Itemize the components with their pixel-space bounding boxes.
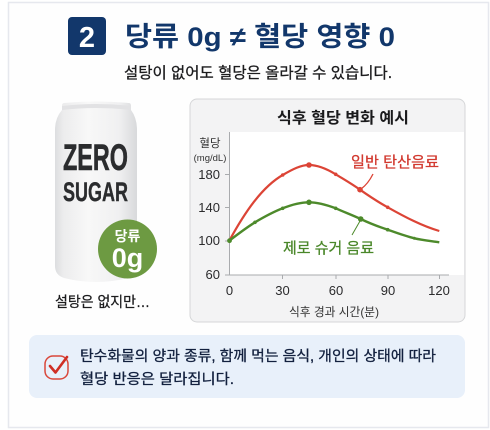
green sugar badge: 당류 xyxy=(115,228,140,244)
can caption: 설탕은 없지만… xyxy=(55,294,150,311)
x axis labels: 90 xyxy=(381,283,395,298)
red series label xyxy=(351,154,439,189)
green series label: 제로 슈거 음료 xyxy=(283,240,374,257)
green sugar badge xyxy=(98,220,157,278)
y axis labels: 140 xyxy=(198,200,220,215)
title: 당류 0g ≠ 혈당 영향 0 xyxy=(125,22,395,52)
red line: regular soda xyxy=(229,162,439,241)
x axis labels: 0 xyxy=(226,283,233,298)
y axis labels xyxy=(198,167,220,282)
callout xyxy=(29,335,465,398)
x axis labels: 30 xyxy=(275,283,290,298)
chart title: 식후 혈당 변화 예시 xyxy=(277,109,409,127)
x axis labels xyxy=(226,283,450,298)
y axis title: 혈당 xyxy=(199,136,221,150)
can label: zero: ZERO xyxy=(63,137,128,178)
green line: zero sugar drink xyxy=(227,200,439,243)
callout text: 혈당 반응은 달라집니다. xyxy=(80,371,234,388)
y axis labels: 60 xyxy=(206,267,220,282)
callout text: 탄수화물의 양과 종류, 함께 먹는 음식, 개인의 상태에 따라 xyxy=(80,348,436,365)
green sugar badge: 0g xyxy=(112,243,143,273)
callout text xyxy=(80,348,436,388)
x axis labels: 60 xyxy=(329,283,343,298)
title badge xyxy=(68,17,106,55)
plot background xyxy=(229,132,464,275)
y axis labels: 100 xyxy=(198,233,220,248)
can illustration xyxy=(55,102,137,282)
x axis labels: 120 xyxy=(428,283,450,298)
subtitle: 설탕이 없어도 혈당은 올라갈 수 있습니다. xyxy=(124,64,392,82)
icon: check xyxy=(45,356,68,379)
y axis title: (mg/dL) xyxy=(194,153,226,164)
can label: sugar: SUGAR xyxy=(63,177,128,207)
green series label xyxy=(283,221,374,257)
can body xyxy=(55,102,137,282)
axes xyxy=(225,132,449,279)
y axis title xyxy=(194,136,226,164)
red series label: 일반 탄산음료 xyxy=(351,154,439,171)
y axis labels: 180 xyxy=(198,167,220,182)
x axis title: 식후 경과 시간(분) xyxy=(289,305,379,319)
panel: chart xyxy=(190,99,465,322)
can rim xyxy=(62,104,131,110)
title badge: 2 xyxy=(79,22,95,54)
